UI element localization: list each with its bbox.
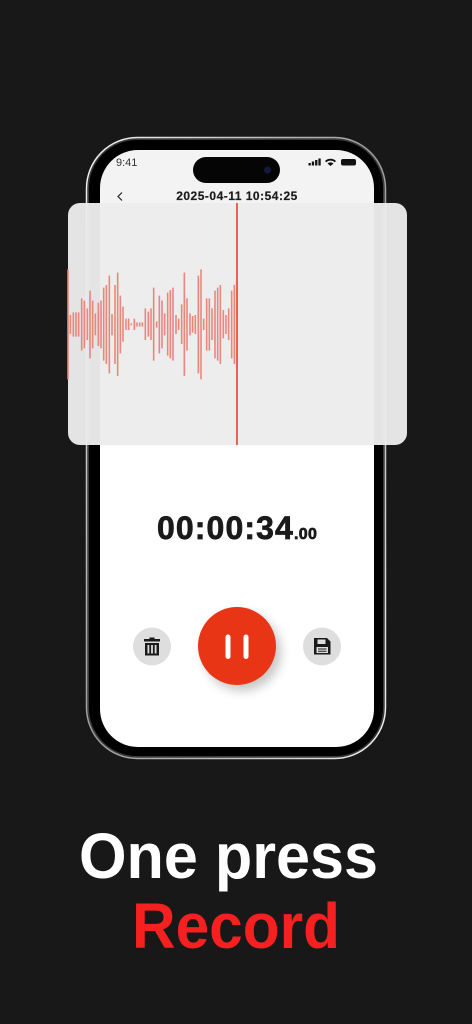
headline line two: Record	[132, 890, 340, 962]
save button	[303, 628, 341, 666]
phone frame	[86, 138, 386, 758]
timer: .00	[294, 526, 317, 543]
icon: trash	[144, 638, 160, 656]
phone bezel	[89, 140, 383, 756]
playhead	[236, 203, 238, 445]
status icons	[308, 158, 356, 166]
recording date: 2025-04-11 10:54:25	[176, 189, 298, 203]
card background	[68, 203, 407, 445]
headline	[79, 820, 378, 962]
icon: pause	[226, 634, 248, 659]
timer: 00:00:34	[157, 510, 294, 546]
waveform card	[68, 203, 407, 445]
back arrow	[118, 192, 122, 200]
icon: floppy disk	[314, 638, 330, 654]
phone screen	[100, 150, 374, 747]
dynamic island	[193, 157, 280, 183]
phone	[86, 138, 386, 758]
delete button	[133, 628, 171, 666]
pause button	[198, 607, 276, 685]
headline line one: One press	[79, 820, 378, 892]
status time: 9:41	[116, 157, 137, 169]
waveform bars	[68, 269, 234, 379]
